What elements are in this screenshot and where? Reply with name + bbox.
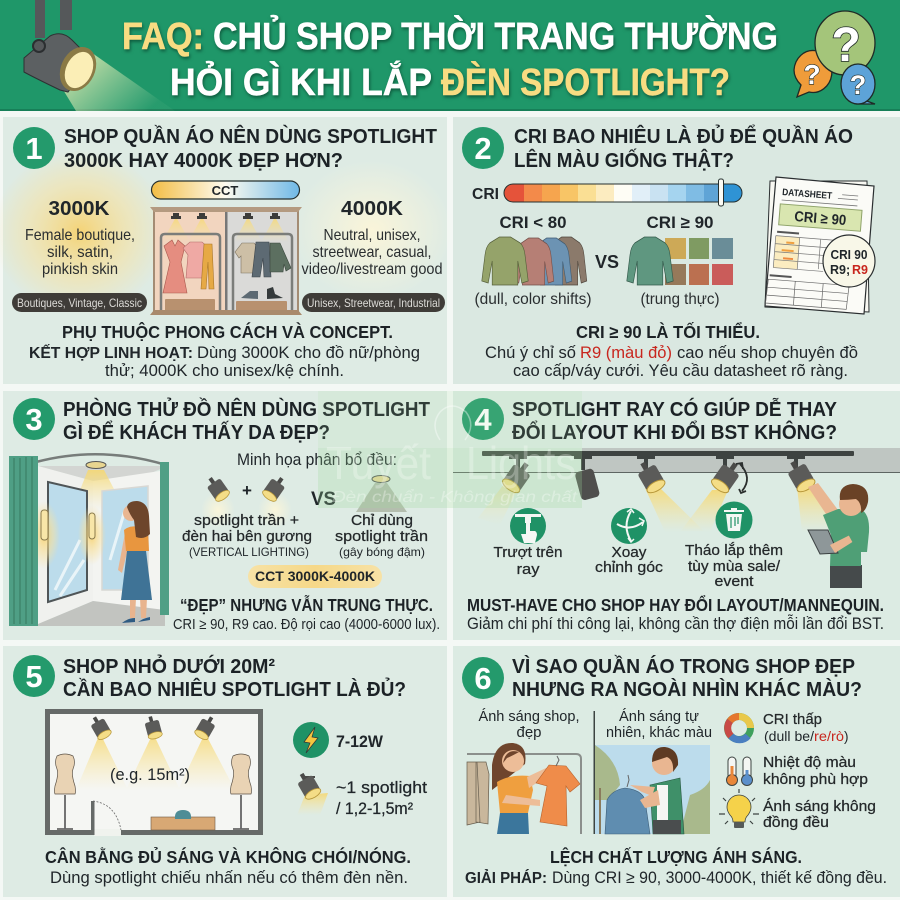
datasheet: CRI 90 — [830, 248, 868, 262]
icon: spotlight with beam — [24, 0, 175, 111]
number badge 6 — [462, 657, 504, 699]
conclusion 1 — [29, 321, 420, 380]
conclusion 6: Dùng CRI ≥ 90, 3000-4000K, thiết kế đồng đều. — [552, 869, 887, 887]
heading 5: SHOP NHỎ DƯỚI 20M² — [63, 654, 275, 678]
pill: unisex — [302, 293, 445, 312]
heading 2: CRI BAO NHIÊU LÀ ĐỦ ĐỂ QUẦN ÁO — [514, 124, 853, 148]
heading 3: GÌ ĐỂ KHÁCH THẤY DA ĐẸP? — [63, 421, 330, 444]
comparison text: (gây bóng đậm) — [339, 545, 425, 559]
comparison text: + — [242, 481, 252, 500]
conclusion 2: cao cấp/váy cưới. Yêu cầu datasheet rõ ràng. — [513, 362, 848, 380]
warm glow — [0, 150, 168, 314]
heading 3: PHÒNG THỬ ĐỒ NÊN DÙNG SPOTLIGHT — [63, 397, 430, 421]
feature: add remove: Tháo lắp thêm — [685, 542, 783, 559]
4000K column: Neutral, unisex, — [324, 227, 420, 244]
icon and label: uneven light: Ánh sáng không — [763, 798, 876, 815]
divider — [594, 711, 595, 834]
conclusion 6: GIẢI PHÁP: — [465, 868, 547, 887]
comparison text: spotlight trần — [335, 528, 428, 545]
title — [122, 14, 778, 104]
outdoor light scene — [595, 708, 712, 834]
feature: add remove: tùy mùa sale/ — [688, 558, 781, 575]
pill: boutiques — [12, 293, 147, 312]
number badge 4: 4 — [474, 402, 492, 437]
conclusion 5 — [45, 846, 411, 887]
feature: slide — [494, 508, 562, 578]
panel 4: track spotlight — [453, 391, 900, 640]
conclusion 2: CRI ≥ 90 LÀ TỐI THIỂU. — [576, 321, 760, 342]
spotlight density: ~1 spotlight — [336, 778, 427, 797]
icon and label: low CRI: CRI thấp — [763, 711, 822, 728]
heading 5 — [63, 654, 406, 701]
conclusion 6 — [465, 846, 887, 887]
conclusion 3: CRI ≥ 90, R9 cao. Độ rọi cao (4000-6000 lux). — [173, 617, 440, 633]
icon and label: uneven light: đồng đều — [763, 814, 829, 831]
woman figure — [118, 501, 152, 623]
comparison text: (VERTICAL LIGHTING) — [189, 545, 309, 559]
number badge 6: 6 — [474, 661, 492, 696]
heading 3 — [63, 397, 430, 444]
VS label: VS — [595, 252, 619, 272]
conclusion 2: R9 (màu đỏ) — [580, 344, 672, 362]
heading 6: NHƯNG RA NGOÀI NHÌN KHÁC MÀU? — [512, 678, 862, 701]
icon and label: uneven light — [719, 789, 876, 831]
watermark: Đèn chuẩn - Không gian chất — [332, 488, 578, 506]
3000K column: 3000K — [48, 197, 110, 220]
3000K column: pinkish skin — [42, 261, 118, 278]
spotlight density — [294, 770, 427, 818]
watermark — [318, 391, 582, 508]
3000K column: Female boutique, — [25, 227, 135, 244]
shop light scene: đẹp — [516, 724, 542, 741]
comparison text: đèn hai bên gương — [182, 528, 312, 545]
high CRI group — [627, 214, 733, 308]
comparison text: Minh họa phân bổ đều: — [237, 451, 397, 469]
feature: add remove: event — [714, 573, 754, 590]
conclusion 2: cao nếu shop chuyên đồ — [677, 344, 858, 362]
icon: question bubbles: ? — [850, 70, 866, 100]
fitting room illustration — [9, 454, 169, 626]
number badge 3 — [13, 398, 55, 440]
conclusion 2: Chú ý chỉ số — [485, 344, 576, 362]
CCT pill — [248, 565, 382, 588]
pill: boutiques: Boutiques, Vintage, Classic — [17, 296, 142, 310]
high CRI group: CRI ≥ 90 — [646, 214, 714, 232]
comparison text — [182, 451, 428, 559]
conclusion 1: thử; 4000K cho unisex/kệ chính. — [105, 362, 344, 380]
feature: slide: Trượt trên — [494, 544, 562, 561]
heading 1: SHOP QUẦN ÁO NÊN DÙNG SPOTLIGHT — [64, 124, 437, 148]
low CRI group: (dull, color shifts) — [474, 291, 592, 308]
icon and label: low CRI: ) — [844, 729, 848, 744]
heading 2: LÊN MÀU GIỐNG THẬT? — [514, 148, 734, 172]
floor plan room — [48, 712, 260, 836]
CRI scale: CRI — [472, 186, 499, 203]
icon: question bubbles: ? — [831, 19, 861, 72]
feature: rotate: Xoay — [612, 544, 647, 561]
low CRI group — [474, 214, 592, 308]
heading 6 — [512, 655, 862, 701]
4000K column: 4000K — [341, 197, 403, 220]
heading 4: SPOTLIGHT RAY CÓ GIÚP DỄ THAY — [512, 397, 838, 421]
panel 6: colour shift — [453, 646, 900, 897]
datasheet: DATASHEET — [782, 187, 833, 202]
icon: question bubbles: ? — [803, 59, 821, 90]
4000K column: streetwear, casual, — [312, 244, 432, 261]
low CRI group: CRI < 80 — [500, 214, 566, 232]
heading 4 — [512, 397, 838, 444]
CRI scale — [472, 179, 742, 206]
number badge 5 — [13, 655, 55, 697]
icon and label: colour temperature: không phù hợp — [763, 771, 868, 788]
high CRI group: (trung thực) — [640, 291, 720, 308]
panel 1: 3000K or 4000K — [0, 117, 452, 384]
wattage — [293, 722, 383, 758]
CCT bar: CCT — [212, 183, 238, 198]
heading 2 — [514, 124, 853, 172]
conclusion 1: KẾT HỢP LINH HOẠT: — [29, 343, 193, 362]
number badge 2: 2 — [474, 131, 492, 166]
clothing rack illustration — [150, 207, 302, 315]
icon and label: colour temperature: Nhiệt độ màu — [763, 754, 856, 771]
wattage: 7-12W — [336, 733, 383, 751]
conclusion 4 — [467, 594, 884, 633]
header banner — [0, 0, 900, 111]
3000K column — [25, 197, 135, 278]
conclusion 3 — [173, 594, 440, 633]
heading 1 — [64, 124, 437, 172]
outdoor light scene: nhiên, khác màu — [606, 724, 712, 741]
datasheet: R9; — [830, 263, 850, 277]
panel 3: fitting room — [3, 391, 447, 640]
CCT bar — [152, 181, 300, 199]
title: FAQ: — [122, 16, 204, 58]
icon: question bubbles — [794, 11, 875, 104]
conclusion 1: PHỤ THUỘC PHONG CÁCH VÀ CONCEPT. — [62, 321, 393, 342]
title: ĐÈN SPOTLIGHT? — [441, 60, 730, 104]
4000K column — [302, 197, 442, 278]
track rail with spotlights — [478, 451, 854, 532]
comparison text: VS — [311, 489, 336, 510]
number badge 3: 3 — [25, 402, 43, 437]
datasheet: R9 — [852, 263, 868, 277]
conclusion 5: CÂN BẰNG ĐỦ SÁNG VÀ KHÔNG CHÓI/NÓNG. — [45, 846, 411, 867]
number badge 2 — [462, 127, 504, 169]
number badge 1: 1 — [25, 131, 43, 166]
number badge 4 — [462, 398, 504, 440]
pill: unisex: Unisex, Streetwear, Industrial — [307, 296, 440, 310]
watermark: Lights — [466, 437, 576, 489]
icon and label: low CRI: (dull be/ — [764, 729, 814, 744]
title: HỎI GÌ KHI LẮP — [170, 60, 432, 104]
conclusion 1: Dùng 3000K cho đồ nữ/phòng — [197, 344, 420, 362]
icon and label: low CRI — [728, 711, 848, 744]
3000K column: silk, satin, — [47, 244, 113, 261]
datasheet — [765, 177, 875, 314]
4000K column: video/livestream good — [302, 261, 442, 278]
number badge 5: 5 — [25, 659, 43, 694]
conclusion 6: LỆCH CHẤT LƯỢNG ÁNH SÁNG. — [550, 846, 802, 867]
heading 4: ĐỔI LAYOUT KHI ĐỔI BST KHÔNG? — [512, 420, 837, 444]
icon and label: colour temperature — [726, 754, 868, 788]
spotlight density: / 1,2-1,5m² — [336, 799, 413, 818]
man with tablet — [808, 483, 869, 588]
heading 1: 3000K HAY 4000K ĐẸP HƠN? — [64, 150, 343, 172]
shop light scene: Ánh sáng shop, — [478, 708, 580, 725]
heading 5: CẦN BAO NHIÊU SPOTLIGHT LÀ ĐỦ? — [63, 677, 406, 701]
floor plan room: (e.g. 15m²) — [110, 765, 190, 784]
conclusion 5: Dùng spotlight chiếu nhấn nếu có thêm đèn nền. — [50, 869, 408, 887]
panel 5: number of spotlights — [3, 646, 447, 897]
comparison text: Chỉ dùng — [351, 512, 413, 529]
datasheet: CRI ≥ 90 — [794, 209, 847, 229]
comparison text: spotlight trần + — [194, 512, 299, 529]
icon and label: low CRI: re/rò — [814, 729, 844, 744]
outdoor light scene: Ánh sáng tự — [619, 708, 699, 725]
CCT pill: CCT 3000K-4000K — [255, 568, 375, 584]
feature: rotate: chỉnh góc — [595, 559, 664, 576]
conclusion 2 — [485, 321, 858, 380]
panel 2: CRI — [453, 117, 900, 384]
watermark: Tuyết — [326, 437, 431, 489]
number badge 1 — [13, 127, 55, 169]
conclusion 3: “ĐẸP” NHƯNG VẪN TRUNG THỰC. — [180, 594, 433, 615]
feature: rotate — [595, 508, 664, 576]
feature: add remove — [685, 502, 783, 590]
heading 6: VÌ SAO QUẦN ÁO TRONG SHOP ĐẸP — [512, 655, 855, 678]
title: CHỦ SHOP THỜI TRANG THƯỜNG — [213, 14, 778, 58]
feature: slide: ray — [516, 561, 540, 578]
shop light scene — [467, 708, 581, 834]
